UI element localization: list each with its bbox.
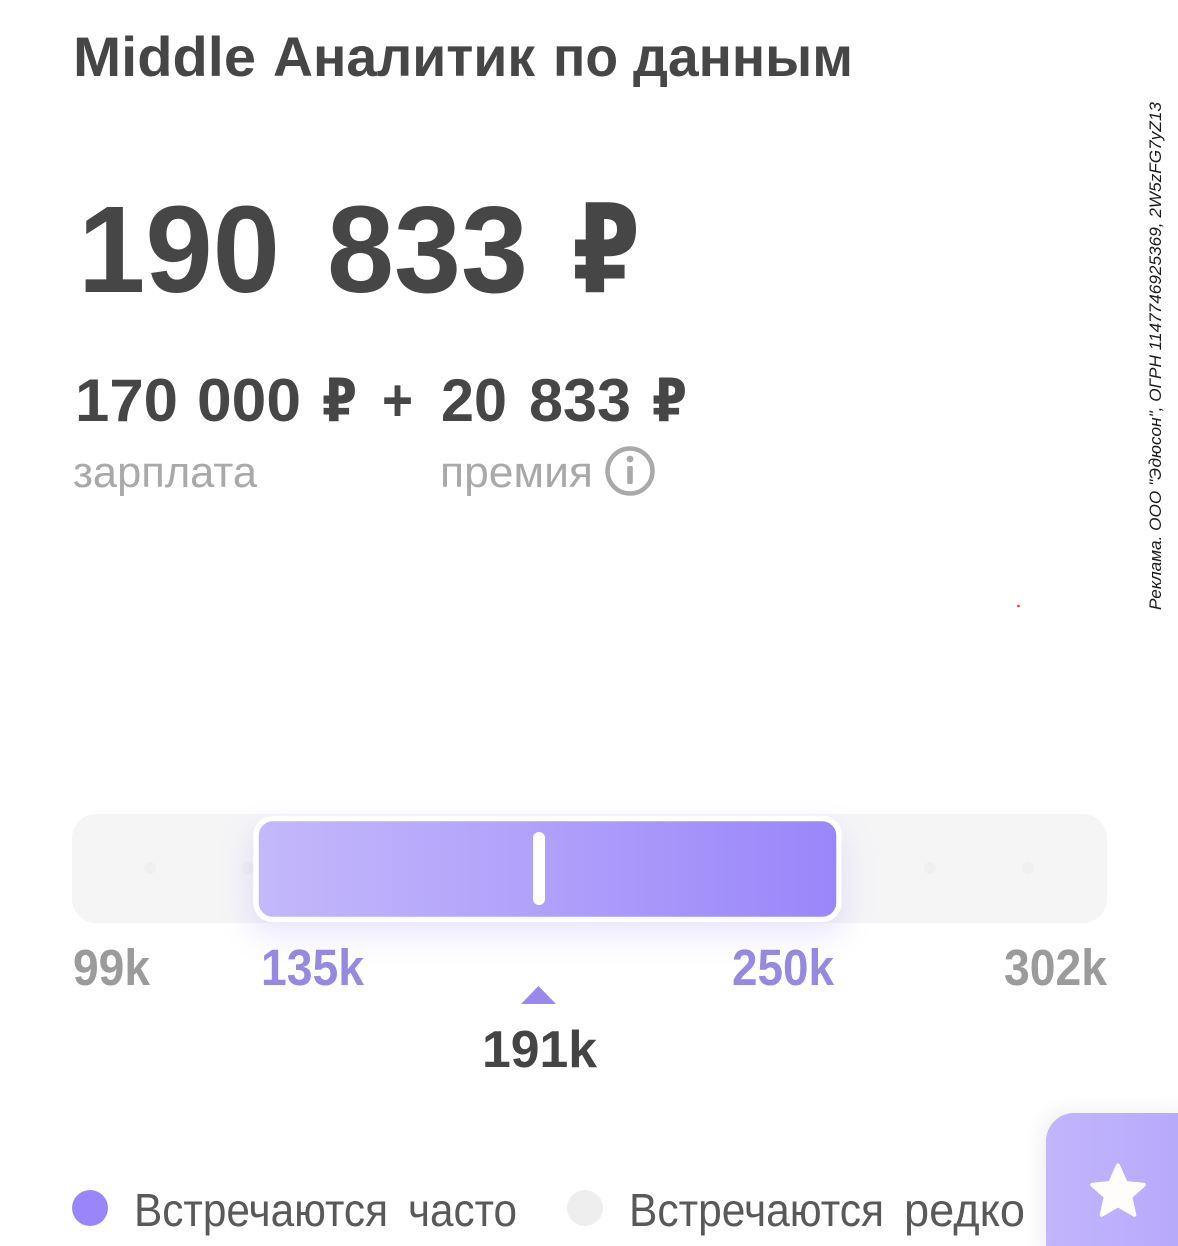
plus sign: + — [382, 367, 413, 434]
legend text: rare — [629, 1184, 1025, 1236]
median handle — [533, 832, 545, 905]
title: данным — [633, 25, 853, 88]
bonus label: премия — [440, 448, 593, 497]
total salary figure: 833 — [327, 182, 528, 319]
title: по — [553, 25, 618, 88]
small red speck — [1017, 605, 1020, 607]
salary range chart — [72, 814, 1108, 1079]
label: upper common bound: 250k — [732, 939, 835, 996]
bonus amount — [441, 367, 687, 434]
bonus amount: 20 — [441, 367, 507, 434]
salary breakdown — [73, 367, 687, 497]
legend swatch: frequent — [72, 1190, 108, 1226]
range bar shadow — [250, 830, 844, 934]
legend text: frequent: Встречаются — [134, 1184, 388, 1236]
legend text: rare: редко — [904, 1184, 1025, 1236]
base salary amount: ₽ — [322, 367, 357, 434]
base salary amount: 170 — [75, 367, 178, 434]
legend text: rare: Встречаются — [629, 1184, 884, 1236]
legend text: frequent: часто — [408, 1184, 517, 1236]
total salary figure: ₽ — [572, 182, 640, 319]
label: minimum: 99k — [73, 939, 151, 996]
bonus amount: 833 — [529, 367, 631, 434]
total salary figure: 190 — [78, 182, 280, 319]
base salary amount — [75, 367, 357, 434]
label: lower common bound: 135k — [261, 939, 365, 996]
title: Middle — [73, 25, 256, 88]
label: maximum: 302k — [1004, 939, 1108, 996]
total salary figure — [78, 182, 640, 319]
marker triangle — [521, 986, 556, 1004]
title: Аналитик — [273, 25, 536, 88]
legend — [72, 1184, 1025, 1236]
advertising disclaimer: Реклама. ООО "Эдюсон", ОГРН 1147746925369, 2W5zFG7yZ13 — [1146, 101, 1165, 610]
icon: star — [1092, 1166, 1144, 1215]
label: median value: 191k — [482, 1021, 597, 1079]
range track — [72, 814, 1107, 923]
legend swatch: rare — [567, 1190, 603, 1226]
favourite button shadow — [1040, 1110, 1178, 1246]
track dots — [144, 862, 1034, 874]
icon: info — [608, 448, 652, 494]
title — [73, 25, 853, 88]
base salary label: зарплата — [73, 448, 258, 497]
base salary amount: 000 — [197, 367, 301, 434]
common range bar — [256, 818, 839, 920]
bonus amount: ₽ — [652, 367, 687, 434]
favourite button — [1046, 1113, 1178, 1246]
